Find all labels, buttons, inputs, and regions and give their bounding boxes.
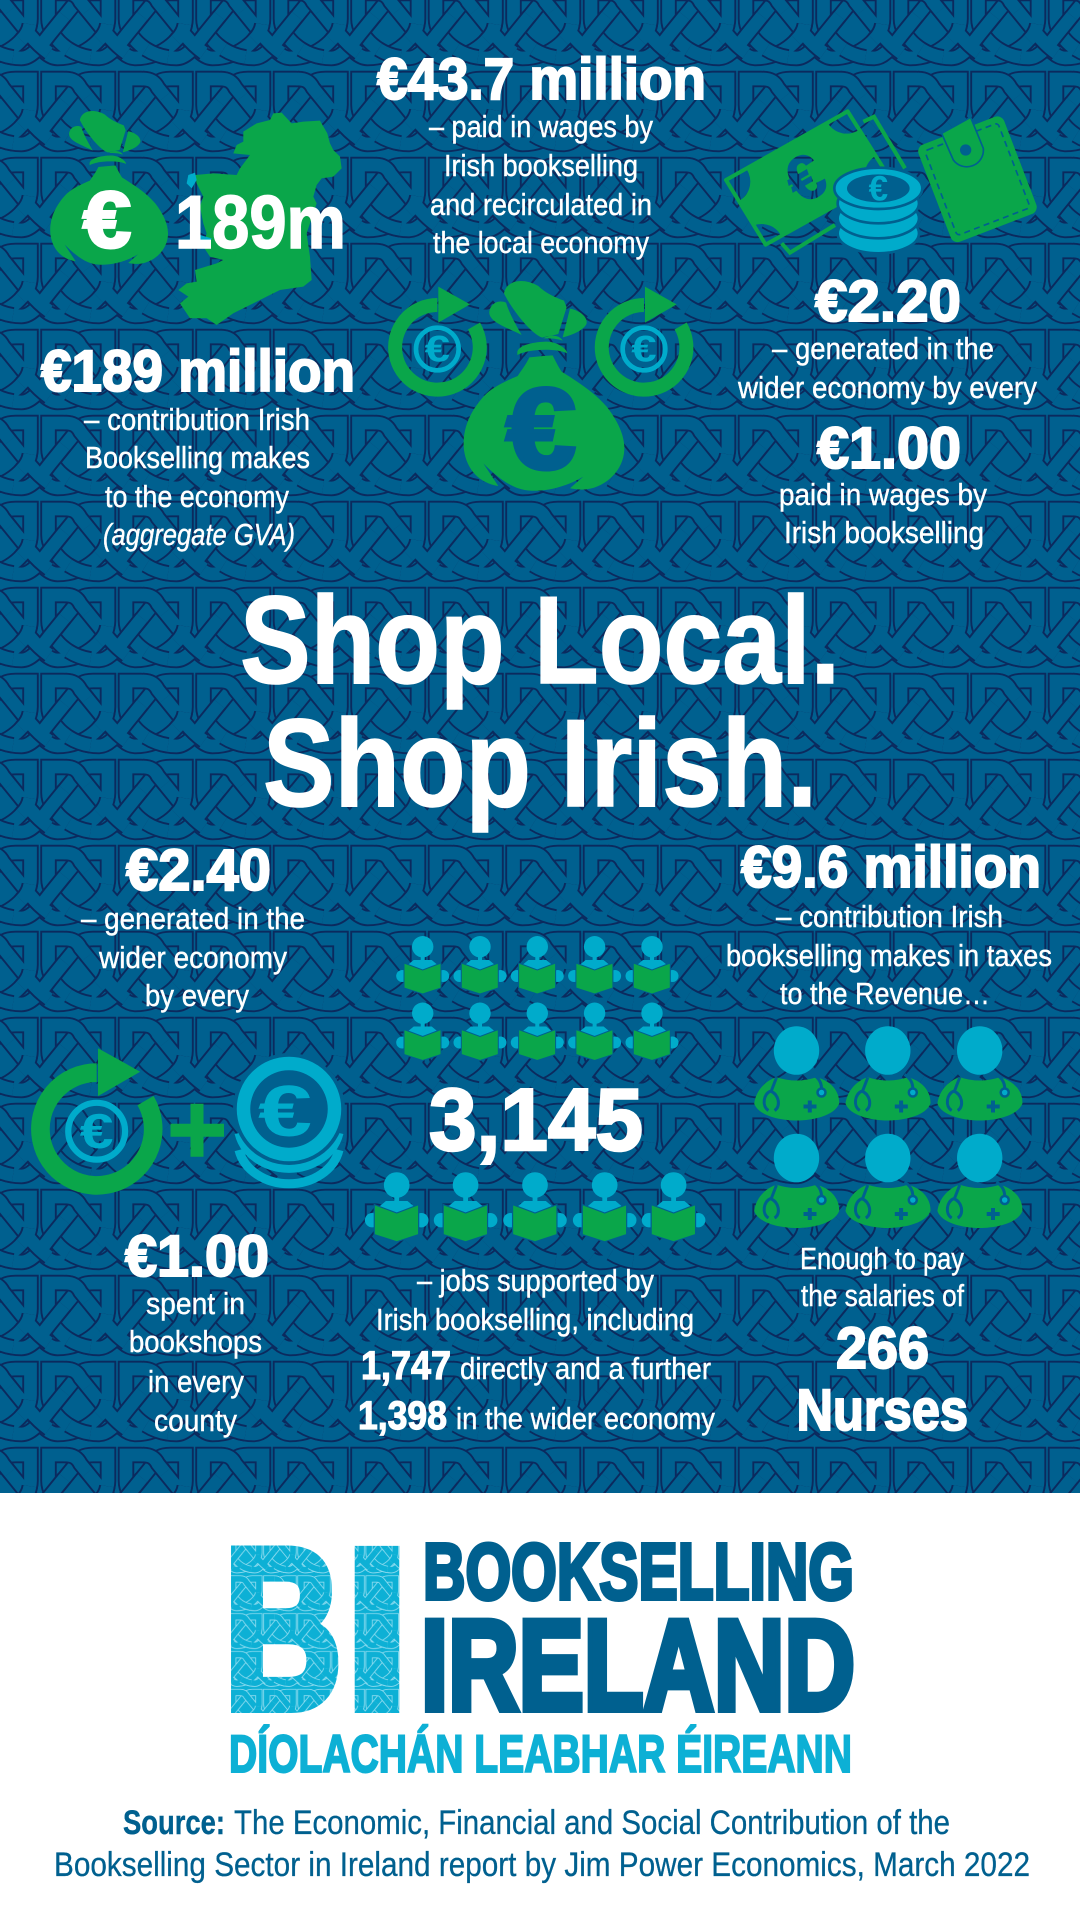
big figure: 266 Nurses: 266 <box>836 1316 929 1381</box>
text block: generated in the wider economy <box>737 331 1037 405</box>
heading: €1.00: €1.00 <box>125 1224 269 1289</box>
text block: jobs supported <box>358 1263 715 1438</box>
icon: banknote, coins and wallet: € <box>869 170 888 209</box>
icon group: readers bottom row <box>365 1172 705 1242</box>
text block: paid in wages: Irish bookselling <box>784 515 984 550</box>
text block: wages description: the local economy <box>433 225 649 260</box>
text block: wages description: – paid in wages by <box>429 109 653 144</box>
text block: wages description: and recirculated in <box>430 187 652 222</box>
panel: €43.7 million wages <box>377 47 706 493</box>
big figure: 189m: 189m <box>175 180 346 264</box>
icon: recirculating money bag <box>395 281 686 493</box>
text block: spent in bookshops in every county: spent in <box>146 1286 245 1321</box>
icon: map of Ireland <box>178 113 342 325</box>
icon: banknote, coins and wallet <box>724 109 1037 256</box>
text block: generated in the wider economy by every <box>81 901 305 1013</box>
icon group: six nurses <box>754 1026 1022 1228</box>
text block: wages description: Irish bookselling <box>444 148 638 183</box>
panel: €189 million contribution <box>41 111 355 552</box>
icon: recirculating euro <box>40 1048 153 1185</box>
heading: €2.40: €2.40 <box>126 838 271 903</box>
heading: €189 million: €189 million <box>41 339 355 404</box>
text block: enough to pay <box>800 1241 964 1313</box>
heading: €43.7 million: €43.7 million <box>377 47 706 112</box>
text block: taxes description: – contribution Irish <box>776 899 1003 934</box>
text block: generated in the wider economy: – generated in the <box>772 331 994 366</box>
text block: generated in the wider economy by every: – generated in the <box>81 901 305 936</box>
text block: generated in the wider economy by every: by every <box>145 978 249 1013</box>
heading: €2.20: €2.20 <box>815 269 961 334</box>
source note: Source: <box>123 1804 225 1842</box>
heading: €9.6 million: €9.6 million <box>741 835 1041 900</box>
logo wordmark: BOOKSELLING: BOOKSELLING <box>423 1527 854 1616</box>
text block: wages description <box>429 109 653 260</box>
text block: taxes description <box>726 899 1052 1011</box>
big figure: 266 Nurses: Nurses <box>796 1378 968 1443</box>
icon: recirculating money bag: € <box>506 365 576 493</box>
icon: stack of euro coins <box>233 1053 345 1184</box>
title: Shop Local. Shop Irish.: Shop Irish. <box>263 695 817 833</box>
text block: contribution description: to the economy <box>105 479 289 514</box>
text block: jobs supported: Irish bookselling, including <box>376 1302 694 1337</box>
icon group: readers top rows <box>396 936 678 1060</box>
logo: Bookselling Ireland <box>224 1494 855 1784</box>
text block: contribution description <box>84 402 310 552</box>
big figure: 266 Nurses <box>796 1316 968 1443</box>
icon: plus sign <box>170 1104 224 1157</box>
text block: taxes description: to the Revenue… <box>780 976 990 1011</box>
icon: money bag with euro: € <box>83 175 131 264</box>
text block: enough to pay: the salaries of <box>801 1278 964 1313</box>
text block: jobs supported: 1,747 <box>361 1344 451 1388</box>
text block: paid in wages: paid in wages by <box>779 477 987 512</box>
text block: spent in bookshops in every county <box>129 1286 262 1438</box>
icon: stack of euro coins: € <box>258 1072 312 1152</box>
logo wordmark: Díolachán Leabhar Éireann: DÍOLACHÁN LEABHAR ÉIREANN <box>229 1724 852 1784</box>
panel: €2.40 generated per €1.00 spent <box>40 838 345 1438</box>
text block: spent in bookshops in every county: county <box>154 1403 237 1438</box>
text block: generated in the wider economy: wider economy by every <box>737 370 1037 405</box>
source note: The Economic, Financial and Social Contribution of the <box>234 1804 950 1842</box>
text block: contribution description: (aggregate GVA) <box>103 517 295 552</box>
title: Shop Local. Shop Irish.: Shop Local. <box>240 572 840 710</box>
panel: €9.6 million taxes <box>726 835 1052 1443</box>
text block: jobs supported: directly and a further <box>460 1351 711 1386</box>
text block: generated in the wider economy by every: wider economy <box>98 940 287 975</box>
logo wordmark: IRELAND: IRELAND <box>421 1594 855 1738</box>
logo mark: BI knot letters: I <box>334 1494 420 1765</box>
text block: paid in wages <box>779 477 987 550</box>
text block: enough to pay: Enough to pay <box>800 1241 964 1276</box>
source note <box>54 1804 1030 1884</box>
big figure: 3,145: 3,145 <box>429 1070 643 1169</box>
icon: money bag with euro <box>50 111 168 265</box>
heading: €1.00: €1.00 <box>817 416 961 481</box>
text block: contribution description: – contribution Irish <box>84 402 310 437</box>
logo mark: BI knot letters: B <box>224 1502 342 1755</box>
text block: spent in bookshops in every county: in every <box>148 1364 244 1399</box>
text block: jobs supported: in the wider economy <box>456 1401 715 1436</box>
text block: contribution description: Bookselling makes <box>85 440 310 475</box>
panel: €2.20 generated per €1.00 wages <box>720 100 1053 550</box>
text block: jobs supported: – jobs supported by <box>417 1263 654 1298</box>
text block: spent in bookshops in every county: bookshops <box>129 1324 262 1359</box>
text block: jobs supported: 1,398 <box>358 1394 447 1438</box>
title: Shop Local. Shop Irish. <box>240 572 840 833</box>
panel: 3,145 jobs <box>358 936 715 1438</box>
